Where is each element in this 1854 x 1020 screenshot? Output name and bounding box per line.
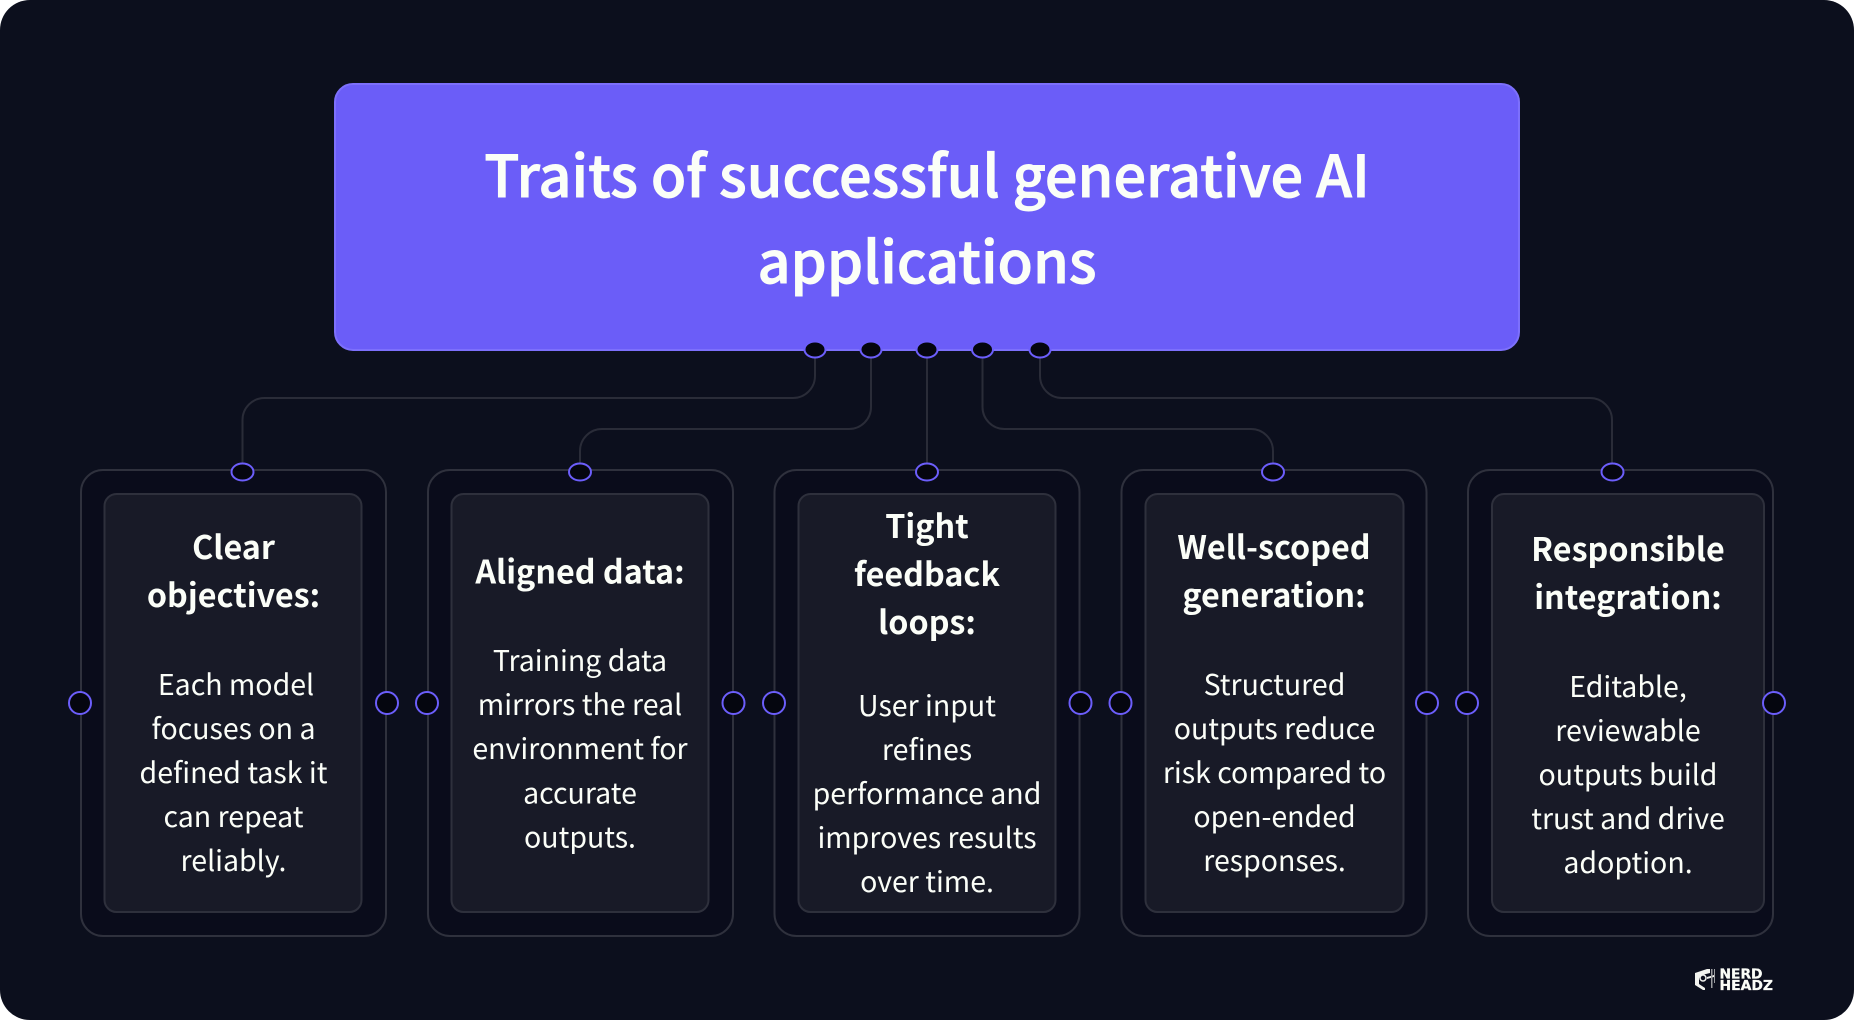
text: tight feedback loops: over time. (860, 860, 994, 901)
text: clear objectives: can repeat (164, 795, 304, 836)
text: tight feedback loops: improves results (817, 816, 1037, 857)
text: aligned data: environment for (472, 727, 689, 768)
panel: responsible integration (1456, 464, 1785, 936)
text: well-scoped generation: open-ended (1193, 795, 1356, 836)
text: aligned data: outputs. (524, 816, 636, 856)
heading: tight feedback loops: loops: (878, 598, 976, 644)
heading: tight feedback loops (854, 502, 1000, 644)
text: responsible integration: trust and drive (1531, 797, 1725, 838)
panel: tight feedback loops (763, 464, 1092, 936)
text: responsible integration: adoption. (1563, 841, 1693, 882)
panel: clear objectives (69, 464, 398, 936)
text: aligned data: Training data (493, 639, 667, 680)
heading: responsible integration: integration: (1534, 573, 1722, 619)
text: well-scoped generation: Structured (1204, 663, 1345, 704)
text: tight feedback loops: refines (882, 728, 972, 769)
heading: clear objectives (147, 523, 320, 617)
wordmark: NERD (1720, 968, 1763, 982)
wordmark (1720, 968, 1773, 994)
heading: well-scoped generation: generation: (1182, 571, 1366, 617)
heading: clear objectives: objectives: (147, 571, 320, 617)
text: aligned data (472, 639, 689, 856)
heading: clear objectives: Clear (192, 523, 276, 569)
text: well-scoped generation: outputs reduce (1174, 707, 1375, 748)
text: responsible integration: reviewable (1555, 709, 1701, 750)
logo: nerd headz (1695, 968, 1773, 994)
text: clear objectives (140, 663, 328, 880)
text: responsible integration: outputs build (1539, 753, 1717, 794)
heading: well-scoped generation (1177, 523, 1371, 617)
heading: responsible integration (1531, 525, 1725, 619)
title (484, 130, 1370, 300)
heading: tight feedback loops: Tight (885, 502, 969, 548)
title box (335, 84, 1519, 350)
panel: aligned data (416, 464, 744, 936)
text: well-scoped generation: responses. (1203, 839, 1346, 880)
text: responsible integration: Editable, (1569, 665, 1687, 706)
text: tight feedback loops (813, 684, 1041, 901)
text: aligned data: mirrors the real (478, 683, 682, 724)
text: aligned data: accurate (523, 772, 637, 812)
title: Traits of successful generative AI (484, 130, 1370, 214)
icon: tiger head (1695, 969, 1715, 990)
text: responsible integration (1531, 665, 1725, 882)
text: well-scoped generation: risk compared to (1163, 751, 1386, 792)
heading: tight feedback loops: feedback (854, 550, 1000, 596)
text: well-scoped generation (1163, 663, 1386, 880)
title: applications (757, 216, 1097, 300)
connector lines (242, 350, 1612, 470)
heading: responsible integration: Responsible (1531, 525, 1725, 571)
text: tight feedback loops: User input (858, 684, 996, 725)
text: clear objectives: defined task it (140, 751, 328, 792)
text: clear objectives: Each model (158, 663, 314, 704)
title box connector dots (804, 342, 1050, 358)
wordmark: HEADZ (1720, 979, 1773, 994)
text: tight feedback loops: performance and (813, 772, 1041, 813)
panel: well-scoped generation (1110, 464, 1438, 936)
heading: well-scoped generation: Well-scoped (1177, 523, 1371, 569)
heading: aligned data: Aligned data: (474, 548, 685, 594)
text: clear objectives: focuses on a (152, 707, 316, 748)
text: clear objectives: reliably. (181, 839, 286, 880)
